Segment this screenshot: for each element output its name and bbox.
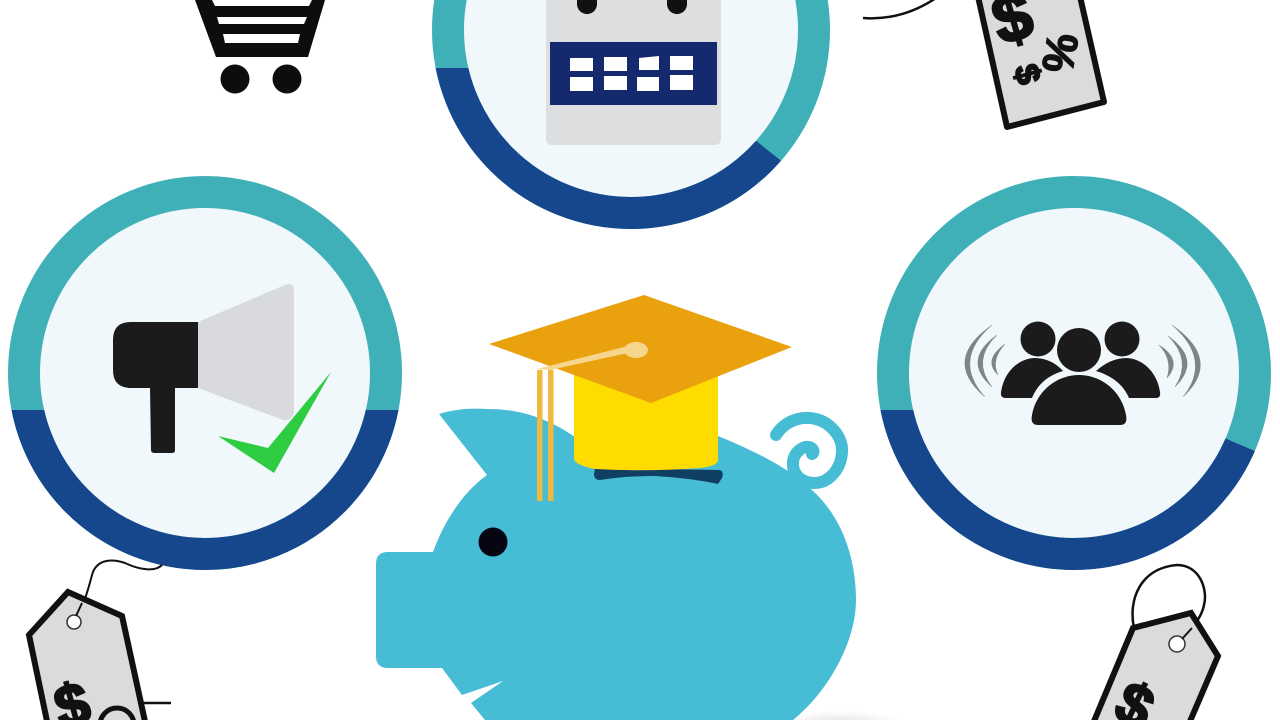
pig body (376, 409, 856, 720)
pig eye (478, 528, 508, 556)
icon: megaphone (113, 284, 294, 453)
panel: calendar circle (448, 0, 814, 213)
icon: calendar (546, 0, 721, 145)
icon: top right price tag: $ (1006, 60, 1048, 88)
icon: group of people (965, 322, 1200, 425)
panel: people circle (893, 192, 1255, 554)
icon: top right price tag (863, 0, 1104, 127)
coin slot (594, 468, 723, 484)
illustration: piggy bank (376, 295, 902, 720)
graduation cap (489, 295, 792, 501)
panel: megaphone circle (24, 192, 386, 554)
icon: bottom right price tag (1092, 565, 1218, 720)
icon: bottom left price tag (29, 561, 171, 720)
tassel (537, 342, 648, 501)
icon: top right price tag: % (1032, 29, 1087, 76)
icon: shopping cart (195, 0, 325, 94)
icon: pig tail (776, 418, 842, 483)
icon: green check mark (218, 372, 331, 473)
